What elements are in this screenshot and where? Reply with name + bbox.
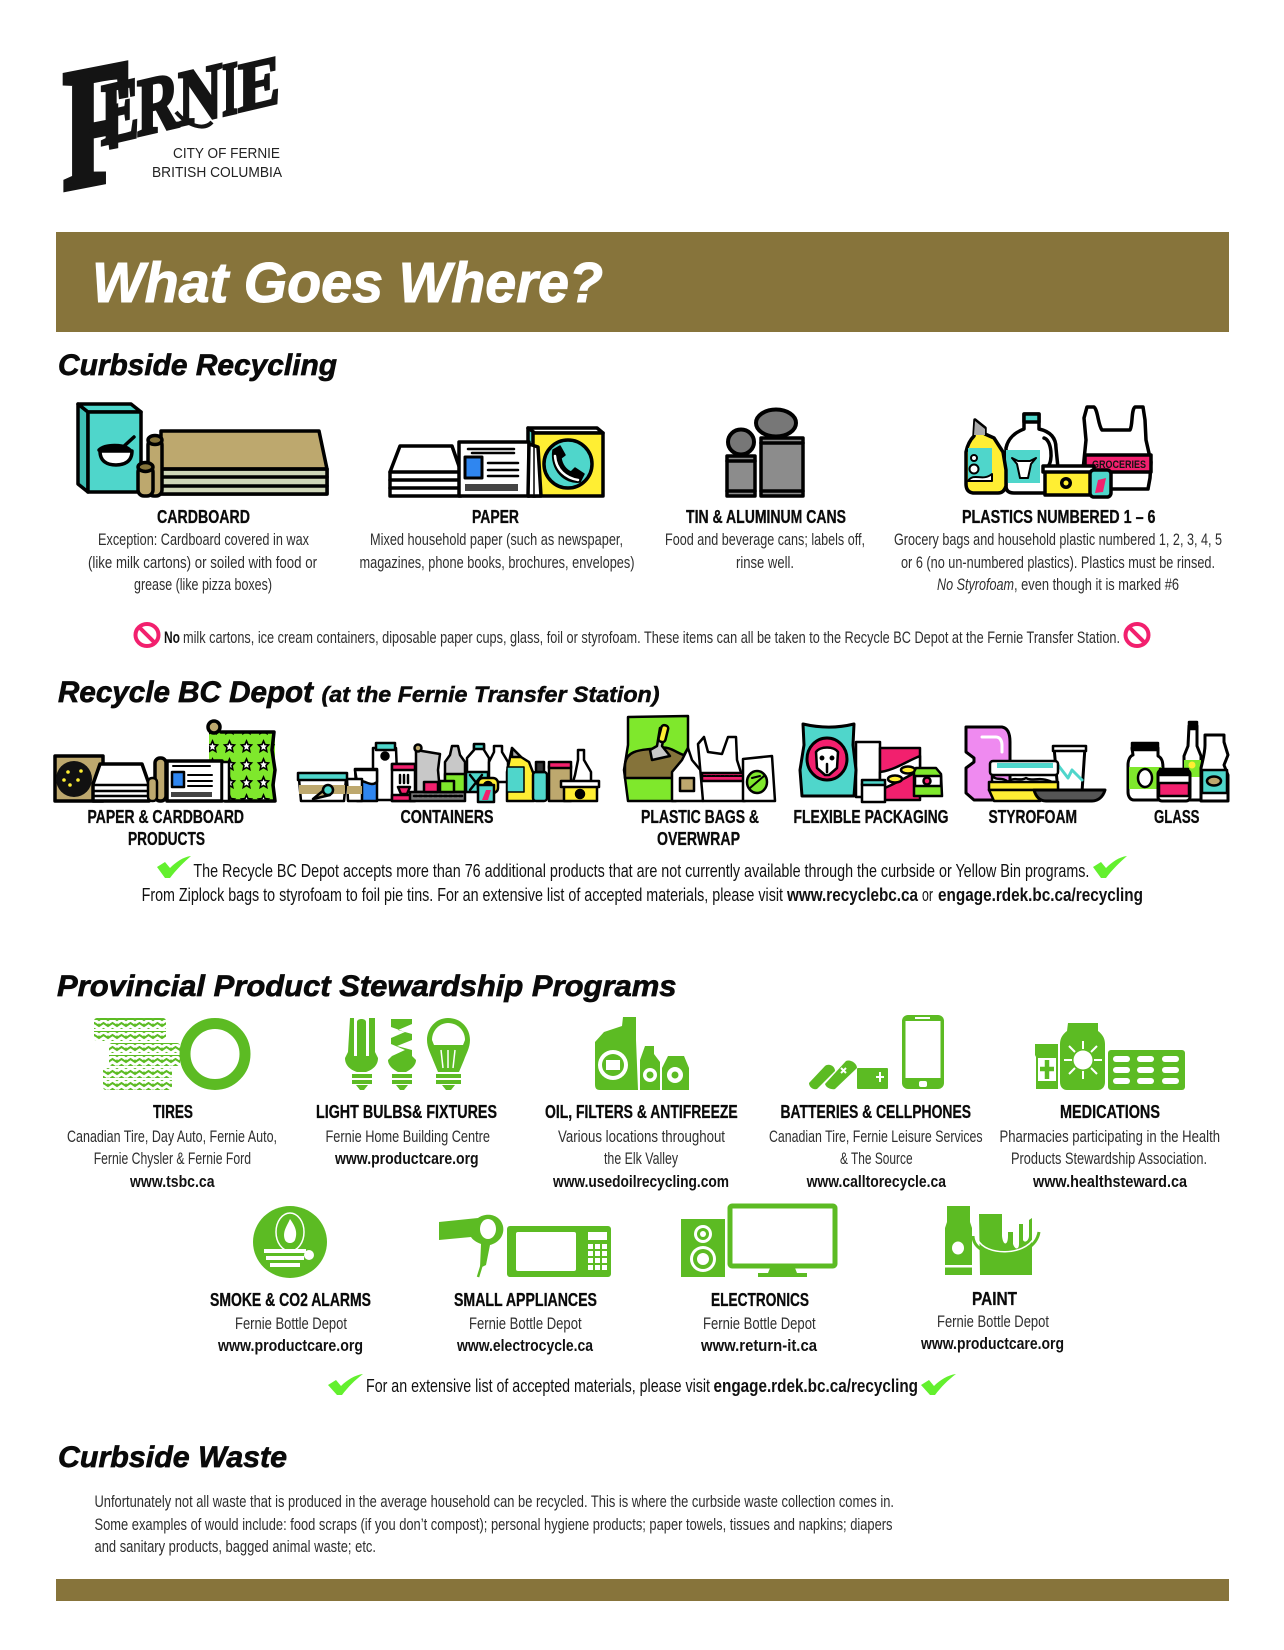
description: small appliances: www.electrocycle.ca <box>456 1337 594 1355</box>
text block: curbside waste description: Unfortunately not all waste that is produced in the average household can be recycled. This is where the curbside waste collection comes in. <box>94 1492 894 1511</box>
notice: items not accepted at curbside <box>136 624 1148 647</box>
description: cans: Food and beverage cans; labels off, <box>665 530 865 549</box>
icon: tires <box>94 1018 245 1090</box>
icon: alarm <box>253 1206 327 1278</box>
logo: City of Fernie: CITY OF FERNIE <box>173 146 280 162</box>
description: electronics: Fernie Bottle Depot <box>703 1314 816 1333</box>
description: alarms: www.productcare.org <box>217 1337 363 1355</box>
label: plastic bags and overwrap: PLASTIC BAGS & <box>641 806 759 827</box>
description: plastics <box>894 530 1222 594</box>
heading: Recycle BC Depot <box>58 676 660 709</box>
icon: check mark right <box>921 1374 956 1395</box>
heading: Curbside Recycling: Curbside Recycling <box>58 349 337 382</box>
notice text: For an extensive list of accepted materials, please visit <box>366 1376 710 1396</box>
panel: cardboard <box>78 404 327 594</box>
heading: Provincial Product Stewardship Programs: Provincial Product Stewardship Programs <box>57 970 676 1003</box>
panel: tin and aluminum cans <box>665 410 865 572</box>
panel: batteries and cellphones <box>769 1015 983 1191</box>
panel: plastics <box>894 407 1222 594</box>
label: flexible packaging: FLEXIBLE PACKAGING <box>794 806 948 827</box>
description: medications <box>1000 1127 1220 1191</box>
label: plastics: PLASTICS NUMBERED 1 – 6 <box>962 506 1156 527</box>
icon: check mark left <box>328 1374 363 1395</box>
logo: City of Fernie: I <box>222 46 238 133</box>
description: paint: www.productcare.org <box>920 1335 1064 1353</box>
label: batteries: BATTERIES & CELLPHONES <box>780 1101 971 1122</box>
description: oil: www.usedoilrecycling.com <box>552 1173 729 1191</box>
label: paper: PAPER <box>472 506 519 527</box>
icon: cereal box, tubes and flattened cardboard <box>78 404 327 496</box>
icon: plastic jugs, bag and tubs <box>966 407 1151 497</box>
description: electronics <box>700 1314 818 1355</box>
description: cans: rinse well. <box>736 553 794 572</box>
icon: pizza box, paper, newspaper, wrap <box>55 721 275 801</box>
description: cardboard: (like milk cartons) or soiled with food or <box>88 553 317 572</box>
icon: pet food bag and pouches <box>800 724 942 802</box>
panel: light bulbs and fixtures <box>316 1018 497 1168</box>
logo: City of Fernie <box>63 22 282 227</box>
panel: flexible packaging <box>794 724 948 827</box>
notice text: or <box>922 885 933 905</box>
icon: batteries and phone <box>809 1015 944 1089</box>
description: light bulbs: www.productcare.org <box>334 1150 479 1168</box>
label: paper and cardboard products: PRODUCTS <box>128 828 205 849</box>
icon: medication jars and blister pack <box>1035 1023 1185 1090</box>
icon: foam pieces <box>966 727 1105 801</box>
description: cardboard: grease (like pizza boxes) <box>134 575 272 594</box>
description: cardboard: Exception: Cardboard covered in wax <box>98 530 309 549</box>
description: alarms <box>217 1314 363 1355</box>
panel: paper and cardboard products <box>55 721 275 849</box>
label: electronics: ELECTRONICS <box>711 1289 809 1310</box>
label: paper and cardboard products: PAPER & CARDBOARD <box>88 806 244 827</box>
icon: oil bottles <box>595 1017 689 1090</box>
description: tires: Fernie Chysler & Fernie Ford <box>94 1149 251 1168</box>
label: paper and cardboard products <box>88 806 244 849</box>
description: tires: Canadian Tire, Day Auto, Fernie Auto, <box>67 1127 277 1146</box>
label: small appliances: SMALL APPLIANCES <box>454 1289 597 1310</box>
icon: hair dryer and microwave <box>439 1215 611 1277</box>
icon: assorted containers <box>298 743 599 802</box>
description: cans <box>665 530 865 572</box>
panel: paper <box>360 428 634 572</box>
description: tires: www.tsbc.ca <box>129 1173 215 1191</box>
text block: curbside waste description: Some examples of would include: food scraps (if you don’t compost); personal hygiene products; paper towels, tissues and napkins; diapers <box>94 1515 892 1534</box>
icon: check mark right <box>1093 856 1127 878</box>
description: batteries: Canadian Tire, Fernie Leisure Services <box>769 1127 983 1146</box>
title banner: What Goes Where? <box>92 251 603 315</box>
description: paper: magazines, phone books, brochures, envelopes) <box>360 553 634 572</box>
label: cardboard: CARDBOARD <box>157 506 250 527</box>
heading: Recycle BC Depot: (at the Fernie Transfer Station) <box>322 682 660 707</box>
text block: curbside waste description <box>94 1492 894 1556</box>
label: tires: TIRES <box>153 1101 193 1122</box>
panel: electronics <box>681 1206 835 1355</box>
description: paint <box>920 1312 1064 1353</box>
notice text: engage.rdek.bc.ca/recycling <box>714 1376 918 1396</box>
description: paint: Fernie Bottle Depot <box>937 1312 1049 1331</box>
panel: paint <box>920 1206 1064 1353</box>
logo: City of Fernie: E <box>238 40 280 128</box>
label: alarms: SMOKE & CO2 ALARMS <box>210 1289 371 1310</box>
notice text: www.recyclebc.ca <box>786 885 919 905</box>
panel: medications <box>1000 1023 1220 1191</box>
icon: jars and bottles <box>1128 722 1228 801</box>
panel: glass <box>1128 722 1228 827</box>
icon: bags <box>624 716 775 801</box>
description: plastics: , even though it is marked #6 <box>1014 575 1179 594</box>
label: plastic bags and overwrap: OVERWRAP <box>657 828 740 849</box>
logo: City of Fernie: N <box>178 46 222 144</box>
label: paint: PAINT <box>972 1288 1018 1309</box>
icon: check mark left <box>157 856 191 878</box>
description: tires <box>67 1127 277 1191</box>
description: plastics: No Styrofoam <box>937 575 1014 594</box>
panel: styrofoam <box>966 727 1105 827</box>
icon: speaker and monitor <box>681 1206 835 1277</box>
icon: light bulbs <box>345 1018 470 1090</box>
description: light bulbs: Fernie Home Building Centre <box>326 1127 490 1146</box>
notice text: From Ziplock bags to styrofoam to foil pie tins. For an extensive list of accepted materials, please visit <box>142 885 783 905</box>
description: medications: Products Stewardship Association. <box>1011 1149 1207 1168</box>
label: cans: TIN & ALUMINUM CANS <box>686 506 846 527</box>
description: oil <box>552 1127 729 1191</box>
description: oil: the Elk Valley <box>604 1149 678 1168</box>
notice: stewardship materials list <box>328 1374 956 1396</box>
footer bar <box>56 1579 1229 1601</box>
description: electronics: www.return-it.ca <box>700 1337 818 1355</box>
label: containers: CONTAINERS <box>400 806 494 827</box>
label: plastic bags and overwrap <box>641 806 759 849</box>
panel: plastic bags and overwrap <box>624 716 775 849</box>
text block: curbside waste description: and sanitary products, bagged animal waste; etc. <box>94 1537 376 1556</box>
logo: City of Fernie: BRITISH COLUMBIA <box>152 165 282 181</box>
icon: paper stack, newspaper and phone book <box>390 428 603 496</box>
description: small appliances: Fernie Bottle Depot <box>469 1314 582 1333</box>
icon: plastic jugs, bag and tubs: GROCERIES <box>1092 459 1146 471</box>
description: paper: Mixed household paper (such as newspaper, <box>370 530 623 549</box>
description: small appliances <box>456 1314 594 1355</box>
icon: no symbol right <box>1126 624 1148 646</box>
panel: containers <box>298 743 599 827</box>
description: medications: Pharmacies participating in the Health <box>1000 1127 1220 1146</box>
description: medications: www.healthsteward.ca <box>1032 1173 1188 1191</box>
description: light bulbs <box>326 1127 490 1168</box>
panel: oil, filters and antifreeze <box>545 1017 738 1191</box>
notice text <box>142 861 1143 905</box>
logo: City of Fernie: E <box>101 58 139 165</box>
description: oil: Various locations throughout <box>558 1127 725 1146</box>
label: styrofoam: STYROFOAM <box>988 806 1077 827</box>
icon: cans <box>727 410 803 496</box>
panel: tires <box>67 1018 277 1191</box>
icon: spray can and paint bucket <box>945 1206 1039 1275</box>
description: batteries <box>769 1127 983 1191</box>
label: medications: MEDICATIONS <box>1060 1101 1160 1122</box>
label: glass: GLASS <box>1154 806 1200 827</box>
notice: Recycle BC Depot accepted items <box>142 856 1143 905</box>
description: batteries: & The Source <box>840 1149 913 1168</box>
logo: City of Fernie: F <box>63 22 131 227</box>
description: alarms: Fernie Bottle Depot <box>235 1314 347 1333</box>
title banner <box>56 232 1229 332</box>
description: cardboard <box>88 530 317 594</box>
logo: City of Fernie: R <box>137 54 180 154</box>
description: paper <box>360 530 634 572</box>
description: batteries: www.calltorecycle.ca <box>806 1173 947 1191</box>
label: light bulbs: LIGHT BULBS& FIXTURES <box>316 1101 497 1122</box>
icon: no symbol left <box>136 624 158 646</box>
heading: Recycle BC Depot: Recycle BC Depot <box>58 676 315 709</box>
label: oil: OIL, FILTERS & ANTIFREEZE <box>545 1101 738 1122</box>
heading: Curbside Waste: Curbside Waste <box>58 1441 287 1474</box>
notice text: No <box>164 628 180 647</box>
panel: small appliances <box>439 1215 611 1355</box>
panel: smoke and CO2 alarms <box>210 1206 371 1355</box>
notice text: engage.rdek.bc.ca/recycling <box>938 885 1143 905</box>
